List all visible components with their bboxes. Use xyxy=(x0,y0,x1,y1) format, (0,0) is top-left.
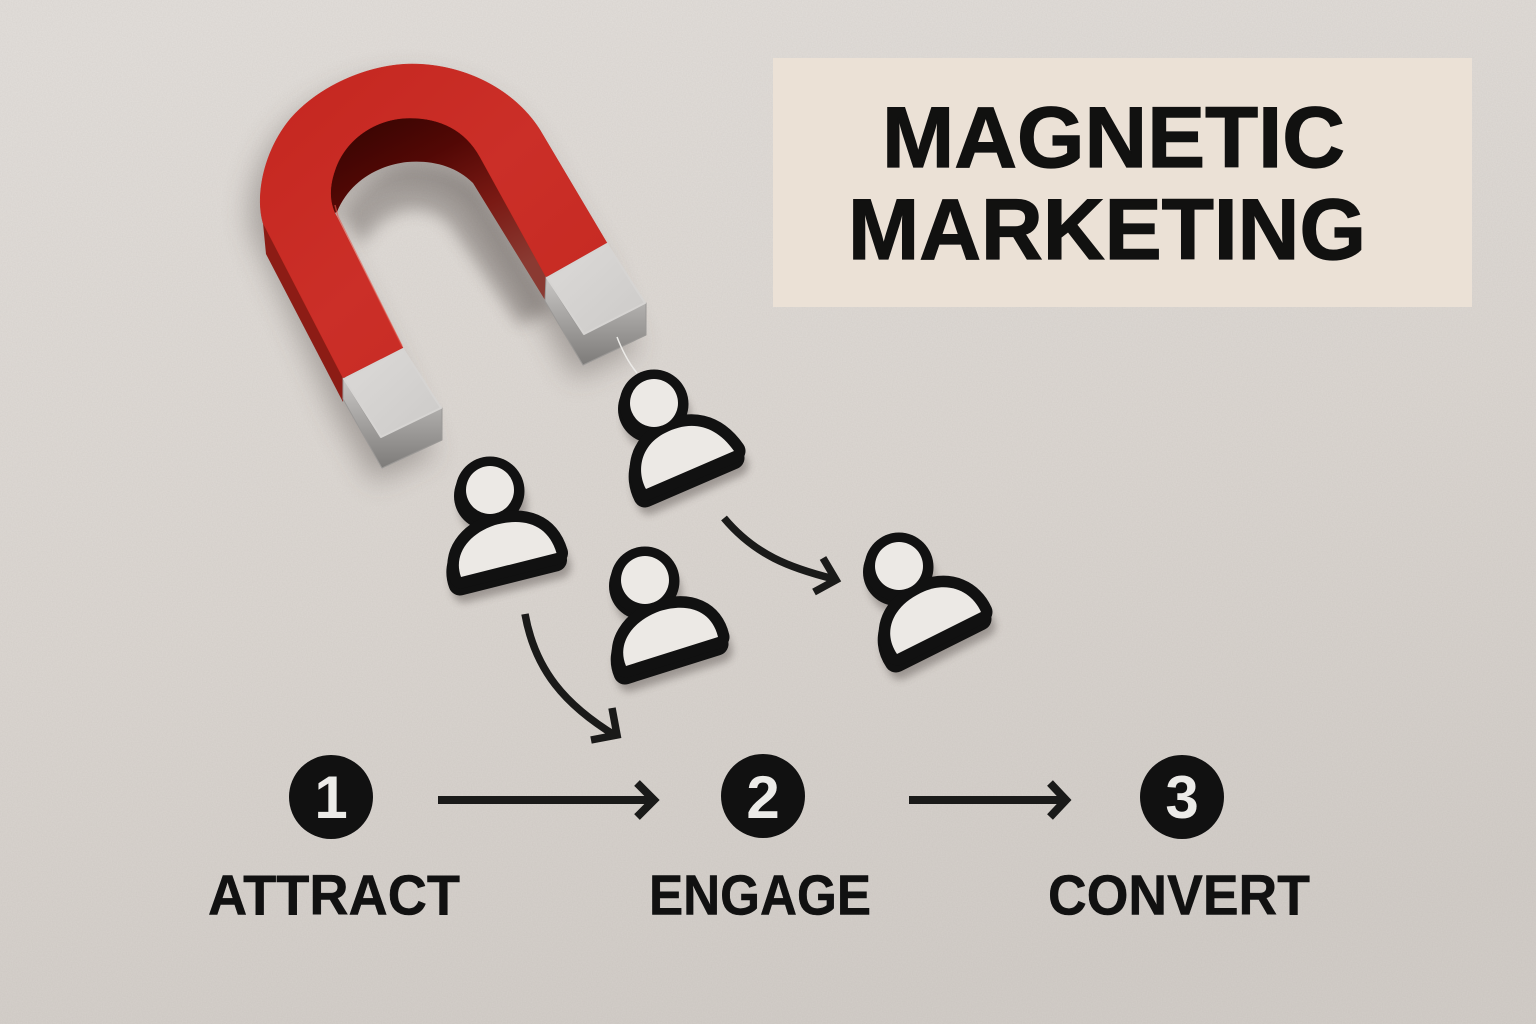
step 1: attract xyxy=(208,755,460,926)
curved arrow: left person to engage xyxy=(525,614,617,740)
label ENGAGE: ENGAGE xyxy=(649,864,871,926)
number badge 1: 1 xyxy=(314,764,348,831)
step 3: convert xyxy=(1048,755,1310,926)
arrow: engage to convert xyxy=(909,783,1066,817)
left leg inner highlight xyxy=(335,205,402,346)
arrow: attract to engage xyxy=(438,783,654,817)
person icon: left xyxy=(454,456,560,591)
person icon: middle xyxy=(609,546,721,680)
magnet cast shadow xyxy=(250,78,638,482)
person icon: top xyxy=(618,370,737,503)
label ATTRACT: ATTRACT xyxy=(208,864,460,926)
curved arrow: top person to right person xyxy=(724,518,836,592)
number badge 3: 3 xyxy=(1165,764,1199,831)
person icon: right xyxy=(863,532,984,668)
step 2: engage xyxy=(649,754,871,926)
number badge 1 xyxy=(289,755,373,839)
number badge 2 xyxy=(721,754,805,838)
left silver pole xyxy=(343,349,442,468)
horseshoe magnet xyxy=(250,64,646,482)
inner wall xyxy=(329,105,546,300)
right silver pole xyxy=(545,244,646,365)
title line: MAGNETIC: MAGNETIC xyxy=(882,90,1345,186)
red top face xyxy=(260,64,607,378)
label CONVERT: CONVERT xyxy=(1048,864,1310,926)
number badge 2: 2 xyxy=(746,764,780,831)
field line xyxy=(617,337,637,373)
title panel xyxy=(773,58,1472,307)
number badge 3 xyxy=(1140,755,1224,839)
outer side wall xyxy=(263,223,346,402)
title line: MARKETING: MARKETING xyxy=(848,182,1366,278)
